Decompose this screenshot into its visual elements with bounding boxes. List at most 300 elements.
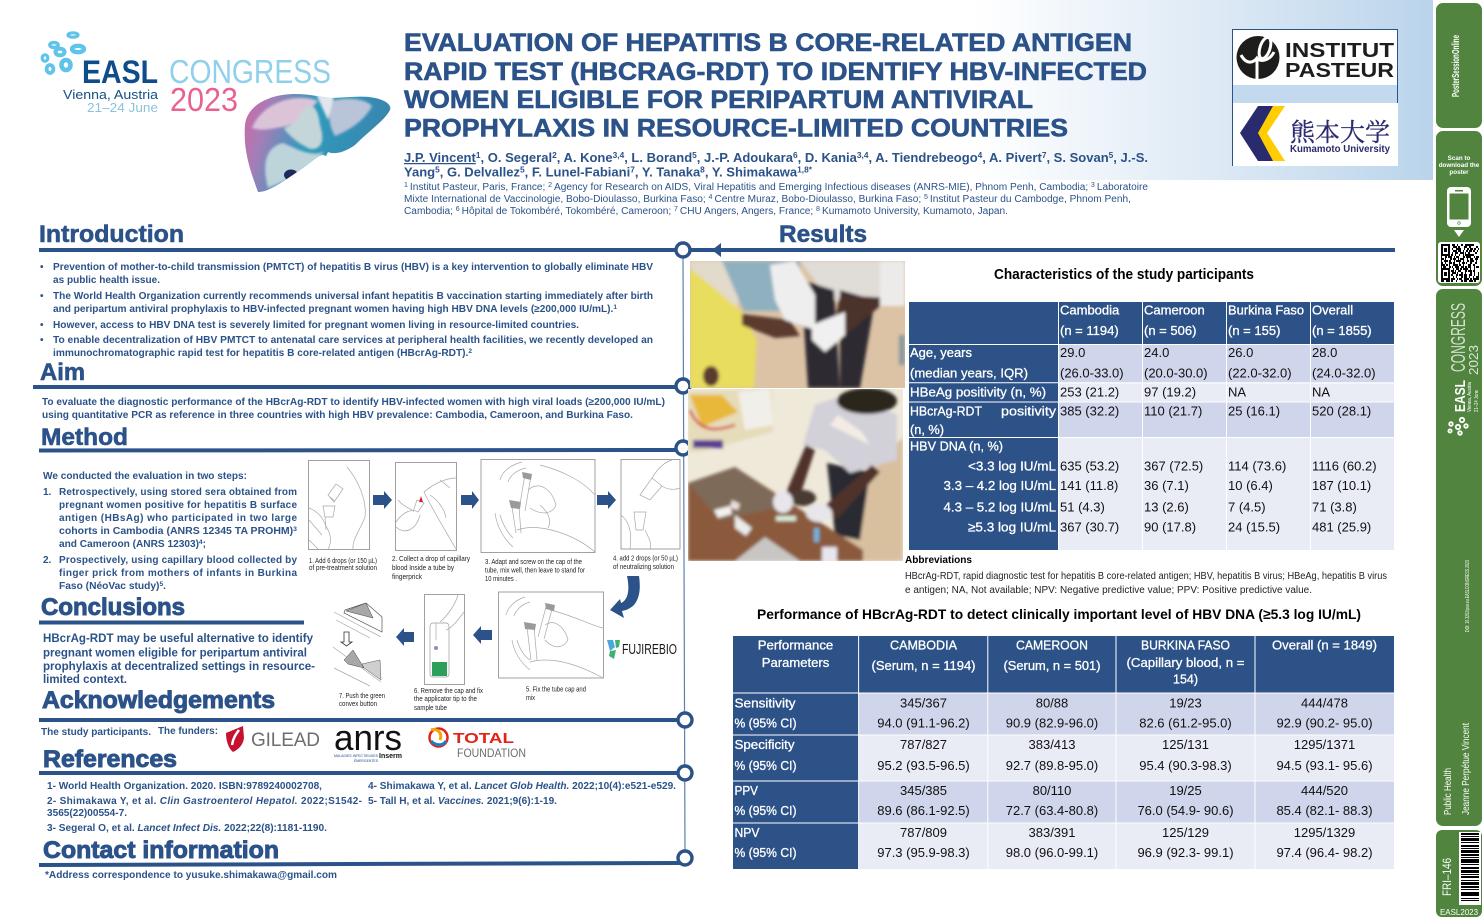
row labels: 3.3 – 4.2 log IU/mL xyxy=(944,478,1056,493)
column: Burkina Faso: 82.6 (61.2-95.0) xyxy=(1139,716,1232,730)
text block: introduction bullets: as public health issue. xyxy=(53,275,160,286)
header row xyxy=(758,638,1377,686)
step 3 xyxy=(481,460,595,583)
logo: ANRS: ÉMERGENTES xyxy=(354,758,379,763)
authors: 8 xyxy=(700,166,705,174)
text block: conclusions: limited context. xyxy=(43,674,127,686)
column: Cameroon: 13 (2.6) xyxy=(1144,500,1189,514)
EASL congress logo: EASL xyxy=(82,54,158,90)
sidebar: EASL session details: CONGRESS xyxy=(1448,303,1470,372)
header row: Overall xyxy=(1312,302,1353,318)
text block: acknowledgements: The funders: xyxy=(158,726,218,737)
header row: Burkina Faso xyxy=(1228,302,1304,318)
affiliations: Agency for Research on AIDS, Viral Hepatitis and Emerging Infectious diseases (ANRS-MIE), Phnom Penh, Cambodia; xyxy=(554,182,1091,193)
header row: (n = 155) xyxy=(1228,323,1280,338)
affiliations: 8 xyxy=(816,206,822,213)
text block: method steps: . xyxy=(163,581,166,592)
panel: method xyxy=(39,424,680,592)
text block: aim: To evaluate the diagnostic performance of the HBcrAg-RDT to identify HBV-infected women with high viral loads (≥200,000 IU/mL) xyxy=(42,397,665,408)
step 2: blood Inside a tube by xyxy=(392,563,454,572)
row labels: Age, years xyxy=(910,345,972,360)
column: Cameroon: 90.9 (82.9-96.0) xyxy=(1006,716,1098,730)
authors: , A. Kone xyxy=(557,151,613,165)
step 4 xyxy=(613,460,680,571)
arrow xyxy=(473,626,492,644)
column: Cameroon: 80/110 xyxy=(1033,783,1071,798)
header row xyxy=(1060,302,1372,338)
logo: Fujirebio xyxy=(607,640,677,659)
column: Overall: 1295/1371 xyxy=(1294,737,1355,752)
column: Cambodia: 94.0 (91.1-96.2) xyxy=(877,716,970,730)
affiliations: 4 xyxy=(709,194,714,201)
sidebar: EASL session details: 2023 xyxy=(1466,345,1481,375)
affiliations: 5 xyxy=(924,194,930,201)
column: Cambodia: 367 (30.7) xyxy=(1060,520,1119,534)
text block: introduction bullets: • xyxy=(40,320,44,331)
step 6: 6. Remove the cap and fix xyxy=(414,686,483,695)
row labels: (n, %) xyxy=(910,422,944,437)
text block: conclusions: pregnant women eligible for peripartum antiviral xyxy=(43,648,307,660)
panel: references xyxy=(39,746,680,834)
column: Overall: (24.0-32.0) xyxy=(1312,366,1376,380)
column: Overall xyxy=(1312,345,1377,534)
header row: Performance xyxy=(758,638,833,652)
text block: aim: using quantitative PCR as reference in three countries with high HBV prevalence: Cambodia, Cameroon, and Burkina Faso. xyxy=(42,410,633,421)
column: Cameroon: 97 (19.2) xyxy=(1144,384,1196,400)
column: Cameroon xyxy=(1144,345,1208,534)
authors: , F. Lunel-Fabiani xyxy=(525,166,630,180)
text block: method steps: finger prick from mothers of infants in Burkina xyxy=(59,568,297,579)
logo: Gilead: GILEAD xyxy=(251,730,320,751)
row labels: % (95% CI) xyxy=(734,758,796,773)
affiliations: 3 xyxy=(1091,182,1097,189)
column: Burkina Faso xyxy=(1228,345,1292,534)
column: Cambodia: 635 (53.2) xyxy=(1060,458,1119,474)
table: characteristics of the study participants xyxy=(909,302,1394,550)
column: Overall: 71 (3.8) xyxy=(1312,500,1357,514)
text block: introduction bullets: 1 xyxy=(613,304,617,311)
title: RAPID TEST (HBCRAG-RDT) TO IDENTIFY HBV-INFECTED xyxy=(404,58,1147,86)
heading: performance table: Performance of HBcrAg-RDT to detect clinically important level of HBV DNA (≥5.3 log IU/mL) xyxy=(757,606,1361,622)
heading: References: References xyxy=(43,746,177,773)
text block: method steps: pregnant women positive for hepatitis B surface xyxy=(59,500,297,511)
abbreviations note xyxy=(905,554,1387,596)
icon: hexagons xyxy=(1448,418,1468,435)
text block: introduction bullets xyxy=(40,262,653,359)
authors: 7 xyxy=(630,166,635,174)
QR code xyxy=(1438,242,1480,283)
text block: method steps: Retrospectively, using stored sera obtained from xyxy=(59,487,297,498)
partner logos: Institut Pasteur and Kumamoto University: INSTITUT xyxy=(1285,39,1395,62)
row labels: Specificity xyxy=(734,737,795,752)
column: Cambodia: 787/827 xyxy=(900,737,947,752)
timeline connector vertical xyxy=(683,250,685,858)
authors: , J.-S. xyxy=(1113,151,1148,165)
authors: , L. Borand xyxy=(624,151,692,165)
affiliations xyxy=(404,182,1148,217)
column: Cameroon: 92.7 (89.8-95.0) xyxy=(1006,758,1098,773)
heading: characteristics table: Characteristics of the study participants xyxy=(994,267,1254,283)
step 2: fingerprick xyxy=(392,572,422,581)
affiliations: 2 xyxy=(548,182,554,189)
column: Cameroon: (20.0-30.0) xyxy=(1144,366,1208,380)
text block: method steps: and Cameroon (ANRS 12303) xyxy=(59,539,197,550)
timeline nodes xyxy=(676,243,692,865)
column: Cambodia: 345/385 xyxy=(900,783,947,798)
row labels: <3.3 log IU/mL xyxy=(968,458,1056,474)
text block: method steps: 2. xyxy=(43,555,52,566)
EASL congress logo: 21–24 June xyxy=(87,100,158,115)
heading: Method: Method xyxy=(41,424,128,451)
panel: introduction xyxy=(39,221,680,359)
column: Burkina Faso: 19/25 xyxy=(1169,783,1202,798)
column: Overall: 85.4 (82.1- 88.3) xyxy=(1276,803,1373,818)
row labels: NPV xyxy=(734,825,760,840)
partner logos: Institut Pasteur and Kumamoto University: PASTEUR xyxy=(1285,59,1394,82)
column: Cameroon: 72.7 (63.4-80.8) xyxy=(1006,803,1098,818)
authors: 4 xyxy=(978,151,983,160)
column: Cameroon: 24.0 xyxy=(1144,345,1169,360)
text block: introduction bullets: • xyxy=(40,262,44,273)
row labels: Sensitivity xyxy=(734,696,796,710)
column: Overall: 1116 (60.2) xyxy=(1312,458,1377,474)
column: Cambodia: 385 (32.2) xyxy=(1060,404,1119,418)
column: Cameroon: 383/391 xyxy=(1028,825,1076,840)
step 7: convex button xyxy=(339,699,377,708)
affiliations: Centre Muraz, Bobo-Dioulasso, Burkina Faso; xyxy=(714,194,924,205)
arrow xyxy=(597,491,616,509)
text block: reference list xyxy=(47,781,676,834)
icon: Pasteur emblem xyxy=(1236,36,1280,79)
column: Burkina Faso: 125/131 xyxy=(1162,737,1209,752)
step 6: the applicator tip to the xyxy=(414,694,477,703)
arrow xyxy=(373,491,392,509)
row labels: 4.3 – 5.2 log IU/mL xyxy=(944,500,1056,514)
row labels: PPV xyxy=(734,783,758,798)
header row: Cameroon xyxy=(1144,302,1205,318)
header row: (Serum, n = 501) xyxy=(1004,658,1100,673)
authors: 5 xyxy=(435,166,440,174)
column: Cambodia: 95.2 (93.5-96.5) xyxy=(877,758,970,773)
authors: , D. Kania xyxy=(798,151,858,165)
sidebar: EASL session details: EASL xyxy=(1452,380,1469,412)
text block: method steps: cohorts in Cambodia (ANRS 12345 TA PROHM) xyxy=(59,526,282,537)
column: Burkina Faso xyxy=(1137,696,1234,860)
sidebar: poster number and barcode: FRI–146 xyxy=(1440,858,1454,896)
logo: Gilead xyxy=(226,726,320,752)
text block: method steps: We conducted the evaluation in two steps: xyxy=(43,471,247,482)
column: Cambodia: 51 (4.3) xyxy=(1060,500,1105,514)
step 7: 7. Push the green xyxy=(339,691,385,700)
affiliations: Institut Pasteur, Paris, France; xyxy=(410,182,548,193)
authors: Yang xyxy=(404,166,434,180)
title: WOMEN ELIGIBLE FOR PERIPARTUM ANTIVIRAL xyxy=(404,86,1033,114)
heading: Acknowledgements: Acknowledgements xyxy=(42,687,275,714)
icon: EASL hexagons xyxy=(42,33,84,73)
panel: aim xyxy=(33,359,680,421)
text block: introduction bullets: However, access to HBV DNA test is severely limited for pregnant women living in resource-limited countries. xyxy=(53,320,579,331)
text block: introduction bullets: Prevention of mother-to-child transmission (PMTCT) of hepatitis B virus (HBV) is a key intervention to globally eliminate HBV xyxy=(53,262,653,273)
header row: Cambodia xyxy=(1060,302,1120,318)
column: Cameroon: 36 (7.1) xyxy=(1144,478,1189,493)
affiliations: Institut Pasteur du Cambodge, Phnom Penh, xyxy=(930,194,1131,205)
column: Burkina Faso: (22.0-32.0) xyxy=(1228,366,1292,380)
text block: method steps: antigen (HBsAg) who participated in two large xyxy=(59,513,297,524)
column: Overall: 97.4 (96.4- 98.2) xyxy=(1276,845,1373,860)
authors: 1 xyxy=(476,151,481,160)
step 3: tube, mix well, then leave to stand for xyxy=(485,566,585,574)
column: Burkina Faso: 24 (15.5) xyxy=(1228,520,1280,534)
column: Overall: 28.0 xyxy=(1312,345,1337,360)
column: Burkina Faso: 76.0 (54.9- 90.6) xyxy=(1137,803,1234,818)
step 1 xyxy=(308,460,377,572)
step 3: 10 minutes . xyxy=(485,574,517,583)
photo: rapid test on table xyxy=(688,388,903,561)
column: Cameroon: 90 (17.8) xyxy=(1144,520,1196,534)
step 6 xyxy=(414,594,483,712)
affiliations: CHU Angers, Angers, France; xyxy=(680,206,816,217)
sidebar: scan to download: poster xyxy=(1449,169,1469,176)
column: Cameroon: 98.0 (96.0-99.1) xyxy=(1006,845,1098,860)
barcode xyxy=(1461,833,1479,904)
authors: 3,4 xyxy=(613,151,625,160)
column: Cameroon: 367 (72.5) xyxy=(1144,458,1203,474)
logo: Total Foundation xyxy=(430,728,526,760)
authors: , Y. Shimakawa xyxy=(705,166,798,180)
text block: method steps: 5 xyxy=(159,581,164,588)
text block: reference list: 2- Shimakawa Y, et al. Clin Gastroenterol Hepatol. 2022;S1542- xyxy=(47,796,362,807)
column: Overall: 1295/1329 xyxy=(1294,825,1355,840)
step 1: 1. Add 6 drops (or 150 µL) xyxy=(309,556,377,565)
step 5: 5. Fix the tube cap and xyxy=(526,684,586,694)
row labels: % (95% CI) xyxy=(734,716,796,730)
text block: reference list: 1- World Health Organization. 2020. ISBN:9789240002708, xyxy=(47,781,322,792)
header gradient band xyxy=(0,0,1433,180)
EASL congress logo: CONGRESS xyxy=(169,53,331,90)
column: Burkina Faso: 125/129 xyxy=(1162,825,1209,840)
affiliations: Hôpital de Tokombéré, Tokombéré, Cameroon; xyxy=(462,206,674,217)
text block: introduction bullets: • xyxy=(40,335,44,346)
sidebar: EASL session details: Public Health xyxy=(1443,768,1454,815)
row labels: % (95% CI) xyxy=(734,845,796,860)
diagram: rapid test procedure xyxy=(308,460,680,712)
results rule xyxy=(688,243,1395,257)
EASL congress logo xyxy=(42,33,331,118)
header row: CAMEROON xyxy=(1016,638,1088,652)
step 6: sample tube xyxy=(414,703,447,712)
curved arrow xyxy=(610,576,640,618)
column: Cambodia xyxy=(877,696,970,860)
column: Cambodia: 345/367 xyxy=(900,696,947,710)
heading: Results: Results xyxy=(779,221,867,248)
step 3: 3. Adapt and screw on the cap of the xyxy=(485,557,582,566)
text block: conclusions: prophylaxis at decentralized settings in resource- xyxy=(43,661,315,673)
column: Burkina Faso: 25 (16.1) xyxy=(1228,404,1280,418)
table fills xyxy=(733,636,1394,869)
sidebar: EASL session details: Vienna, Austria xyxy=(1467,381,1473,412)
sidebar: EASL session details: DOI: 10.3252/pso.eu.EASLCONGRESS.2023 xyxy=(1465,560,1471,632)
EASL congress logo: 2023 xyxy=(170,81,238,118)
header row: (n = 1855) xyxy=(1312,323,1372,338)
authors: , S. Sovan xyxy=(1046,151,1109,165)
text block: method steps: Faso (NéoVac study) xyxy=(59,581,157,592)
text block: introduction bullets: immunochromatographic rapid test for hepatitis B core-related antigen (HBcrAg-RDT). xyxy=(53,348,463,359)
step 5: mix xyxy=(526,693,535,702)
column: Cambodia: 787/809 xyxy=(900,825,947,840)
row labels xyxy=(734,696,796,860)
logo: Fujirebio: FUJIREBIO xyxy=(622,641,677,658)
authors: 5 xyxy=(1109,151,1114,160)
text block: introduction bullets: The World Health Organization currently recommends universal infant hepatitis B vaccination starting immediately after birth xyxy=(53,291,653,302)
header row: (n = 506) xyxy=(1144,323,1196,338)
heading: Conclusions: Conclusions xyxy=(41,594,185,621)
logo: Total Foundation: FOUNDATION xyxy=(457,746,526,760)
affiliations: 6 xyxy=(456,206,462,213)
header row: 154) xyxy=(1173,672,1198,686)
header row: Overall (n = 1849) xyxy=(1272,638,1377,652)
sidebar: scan to download: Scan to xyxy=(1448,155,1471,162)
header row: Parameters xyxy=(762,655,830,670)
text block: method steps: ; xyxy=(203,539,206,550)
step 4: of neutralizing solution xyxy=(613,562,674,571)
step 2 xyxy=(392,462,470,581)
column: Cambodia: 253 (21.2) xyxy=(1060,384,1119,400)
text block: introduction bullets: and peripartum antiviral prophylaxis to HBV-infected pregnant women having high HBV DNA levels (≥200,000 IU/mL). xyxy=(53,304,608,315)
text block: introduction bullets: To enable decentralization of HBV PMTCT to antenatal care services at peripheral health facilities, we recently developed an xyxy=(53,335,653,346)
authors: 2 xyxy=(552,151,557,160)
sidebar: poster number and barcode: EASL2023 xyxy=(1440,907,1478,917)
sidebar: poster session tab xyxy=(1436,3,1482,128)
heading: Aim: Aim xyxy=(40,359,85,386)
column: Burkina Faso: 26.0 xyxy=(1228,345,1253,360)
header row: BURKINA FASO xyxy=(1141,638,1230,652)
column: Cameroon: 110 (21.7) xyxy=(1144,404,1202,418)
sidebar: EASL session details: 21–24 June xyxy=(1474,390,1480,412)
text block: conclusions: HBcrAg-RDT may be useful alternative to identify xyxy=(43,633,314,645)
sidebar: poster number and barcode xyxy=(1436,830,1482,917)
icon: Kumamoto chevron xyxy=(1240,106,1285,161)
row labels: HBeAg positivity (n, %) xyxy=(910,384,1046,400)
row labels: ≥5.3 log IU/mL xyxy=(968,520,1056,534)
column: Burkina Faso: 10 (6.4) xyxy=(1228,478,1273,493)
column: Cambodia: 29.0 xyxy=(1060,345,1085,360)
column: Overall: 481 (25.9) xyxy=(1312,520,1371,534)
text block: reference list: 5- Tall H, et al. Vaccines. 2021;9(6):1-19. xyxy=(368,796,557,807)
affiliations: 7 xyxy=(674,206,680,213)
header row: (Capillary blood, n = xyxy=(1126,655,1244,670)
text block: conclusions xyxy=(43,633,315,686)
column: Overall: 520 (28.1) xyxy=(1312,404,1371,418)
column: Overall: 444/520 xyxy=(1301,783,1348,798)
column: Cambodia: 97.3 (95.9-98.3) xyxy=(877,845,970,860)
text block: acknowledgements: The study participants. xyxy=(41,727,151,738)
affiliations: Cambodia; xyxy=(404,206,452,217)
text block: acknowledgements xyxy=(41,726,218,738)
abbreviations note: e antigen; NA, Not available; NPV: Negative predictive value; PPV: Positive predictive value. xyxy=(905,585,1312,596)
column: Burkina Faso: 7 (4.5) xyxy=(1228,500,1266,514)
title: PROPHYLAXIS IN RESOURCE-LIMITED COUNTRIES xyxy=(404,114,1068,142)
step 1: of pre-treatment solution xyxy=(309,563,377,572)
authors: , G. Delvallez xyxy=(440,166,520,180)
heading: Introduction: Introduction xyxy=(39,221,184,248)
text block: method steps: Prospectively, using capillary blood collected by xyxy=(59,555,297,566)
affiliations: 1 xyxy=(404,182,410,189)
text block: introduction bullets: 2 xyxy=(468,348,472,355)
column: Cameroon: 383/413 xyxy=(1028,737,1076,752)
logo: ANRS: anrs xyxy=(334,717,402,758)
column: Overall: NA xyxy=(1312,384,1330,400)
affiliations: Kumamoto University, Kumamoto, Japan. xyxy=(822,206,1008,217)
text block: reference list: 3- Segeral O, et al. Lancet Infect Dis. 2022;22(8):1181-1190. xyxy=(47,823,327,834)
text block: contact address: *Address correspondence to yusuke.shimakawa@gmail.com xyxy=(45,870,337,881)
sidebar: scan to download: download the xyxy=(1439,162,1480,169)
step 5 xyxy=(498,592,604,702)
partner logos: Institut Pasteur and Kumamoto University xyxy=(1232,30,1398,166)
text block: aim xyxy=(42,397,665,421)
row labels: positivity xyxy=(1001,404,1057,418)
icon: liver illustration xyxy=(244,94,390,192)
authors: , O. Segeral xyxy=(480,151,552,165)
column: Cameroon: 80/88 xyxy=(1036,696,1068,710)
column: Cambodia: (26.0-33.0) xyxy=(1060,366,1124,380)
column: Overall: 444/478 xyxy=(1301,696,1348,710)
authors: , A. Tiendrebeogo xyxy=(868,151,978,165)
panel: contact information xyxy=(39,837,680,881)
authors: 5 xyxy=(692,151,697,160)
column: Burkina Faso: 95.4 (90.3-98.3) xyxy=(1139,758,1232,773)
table: performance of HBcrAg-RDT xyxy=(733,636,1394,869)
text block: reference list: 3565(22)00554-7. xyxy=(47,808,127,819)
row labels: HBcrAg-RDT xyxy=(910,404,982,418)
authors: 3,4 xyxy=(857,151,869,160)
column: Cambodia: 141 (11.8) xyxy=(1060,478,1118,493)
text block: method steps: 4 xyxy=(199,539,203,546)
authors: J.P. Vincent xyxy=(404,151,477,165)
sidebar: EASL session details: Jeanne Perpétue Vincent xyxy=(1461,723,1472,815)
authors xyxy=(404,151,1148,180)
column: Overall xyxy=(1276,696,1373,860)
title: EVALUATION OF HEPATITIS B CORE-RELATED ANTIGEN xyxy=(404,29,1132,57)
partner logos: Institut Pasteur and Kumamoto University: Kumamoto University xyxy=(1290,144,1390,155)
row labels xyxy=(910,345,1057,534)
column: Cambodia: 89.6 (86.1-92.5) xyxy=(877,803,970,818)
text block: introduction bullets: • xyxy=(40,291,44,302)
panel: acknowledgements xyxy=(39,687,680,763)
step 4: 4. add 2 drops (or 50 µL) xyxy=(613,554,678,562)
column: Overall: 94.5 (93.1- 95.6) xyxy=(1276,758,1373,773)
column: Burkina Faso: 19/23 xyxy=(1169,696,1202,710)
column: Overall: 187 (10.1) xyxy=(1312,478,1371,493)
abbreviations note: Abbreviations xyxy=(905,554,972,566)
icon: phone xyxy=(1447,187,1471,237)
panel: conclusions xyxy=(39,594,315,686)
authors: , Y. Tanaka xyxy=(635,166,701,180)
text block: method steps: 1. xyxy=(43,487,52,498)
photo: fingerprick sampling xyxy=(690,261,905,388)
authors: 6 xyxy=(793,151,798,160)
header row: (n = 1194) xyxy=(1060,323,1119,338)
column: Burkina Faso: NA xyxy=(1228,384,1246,400)
column: Cambodia xyxy=(1060,345,1124,534)
text block: reference list: 4- Shimakawa Y, et al. Lancet Glob Health. 2022;10(4):e521-e529. xyxy=(368,781,676,792)
affiliations: Laboratoire xyxy=(1097,182,1148,193)
header row: (Serum, n = 1194) xyxy=(872,658,976,673)
row labels: % (95% CI) xyxy=(734,803,796,818)
arrow xyxy=(461,491,479,509)
authors: 1,8* xyxy=(797,166,813,174)
logo: Total Foundation: TOTAL xyxy=(453,730,514,747)
partner logos: Institut Pasteur and Kumamoto University: 熊本大学 xyxy=(1290,113,1390,149)
